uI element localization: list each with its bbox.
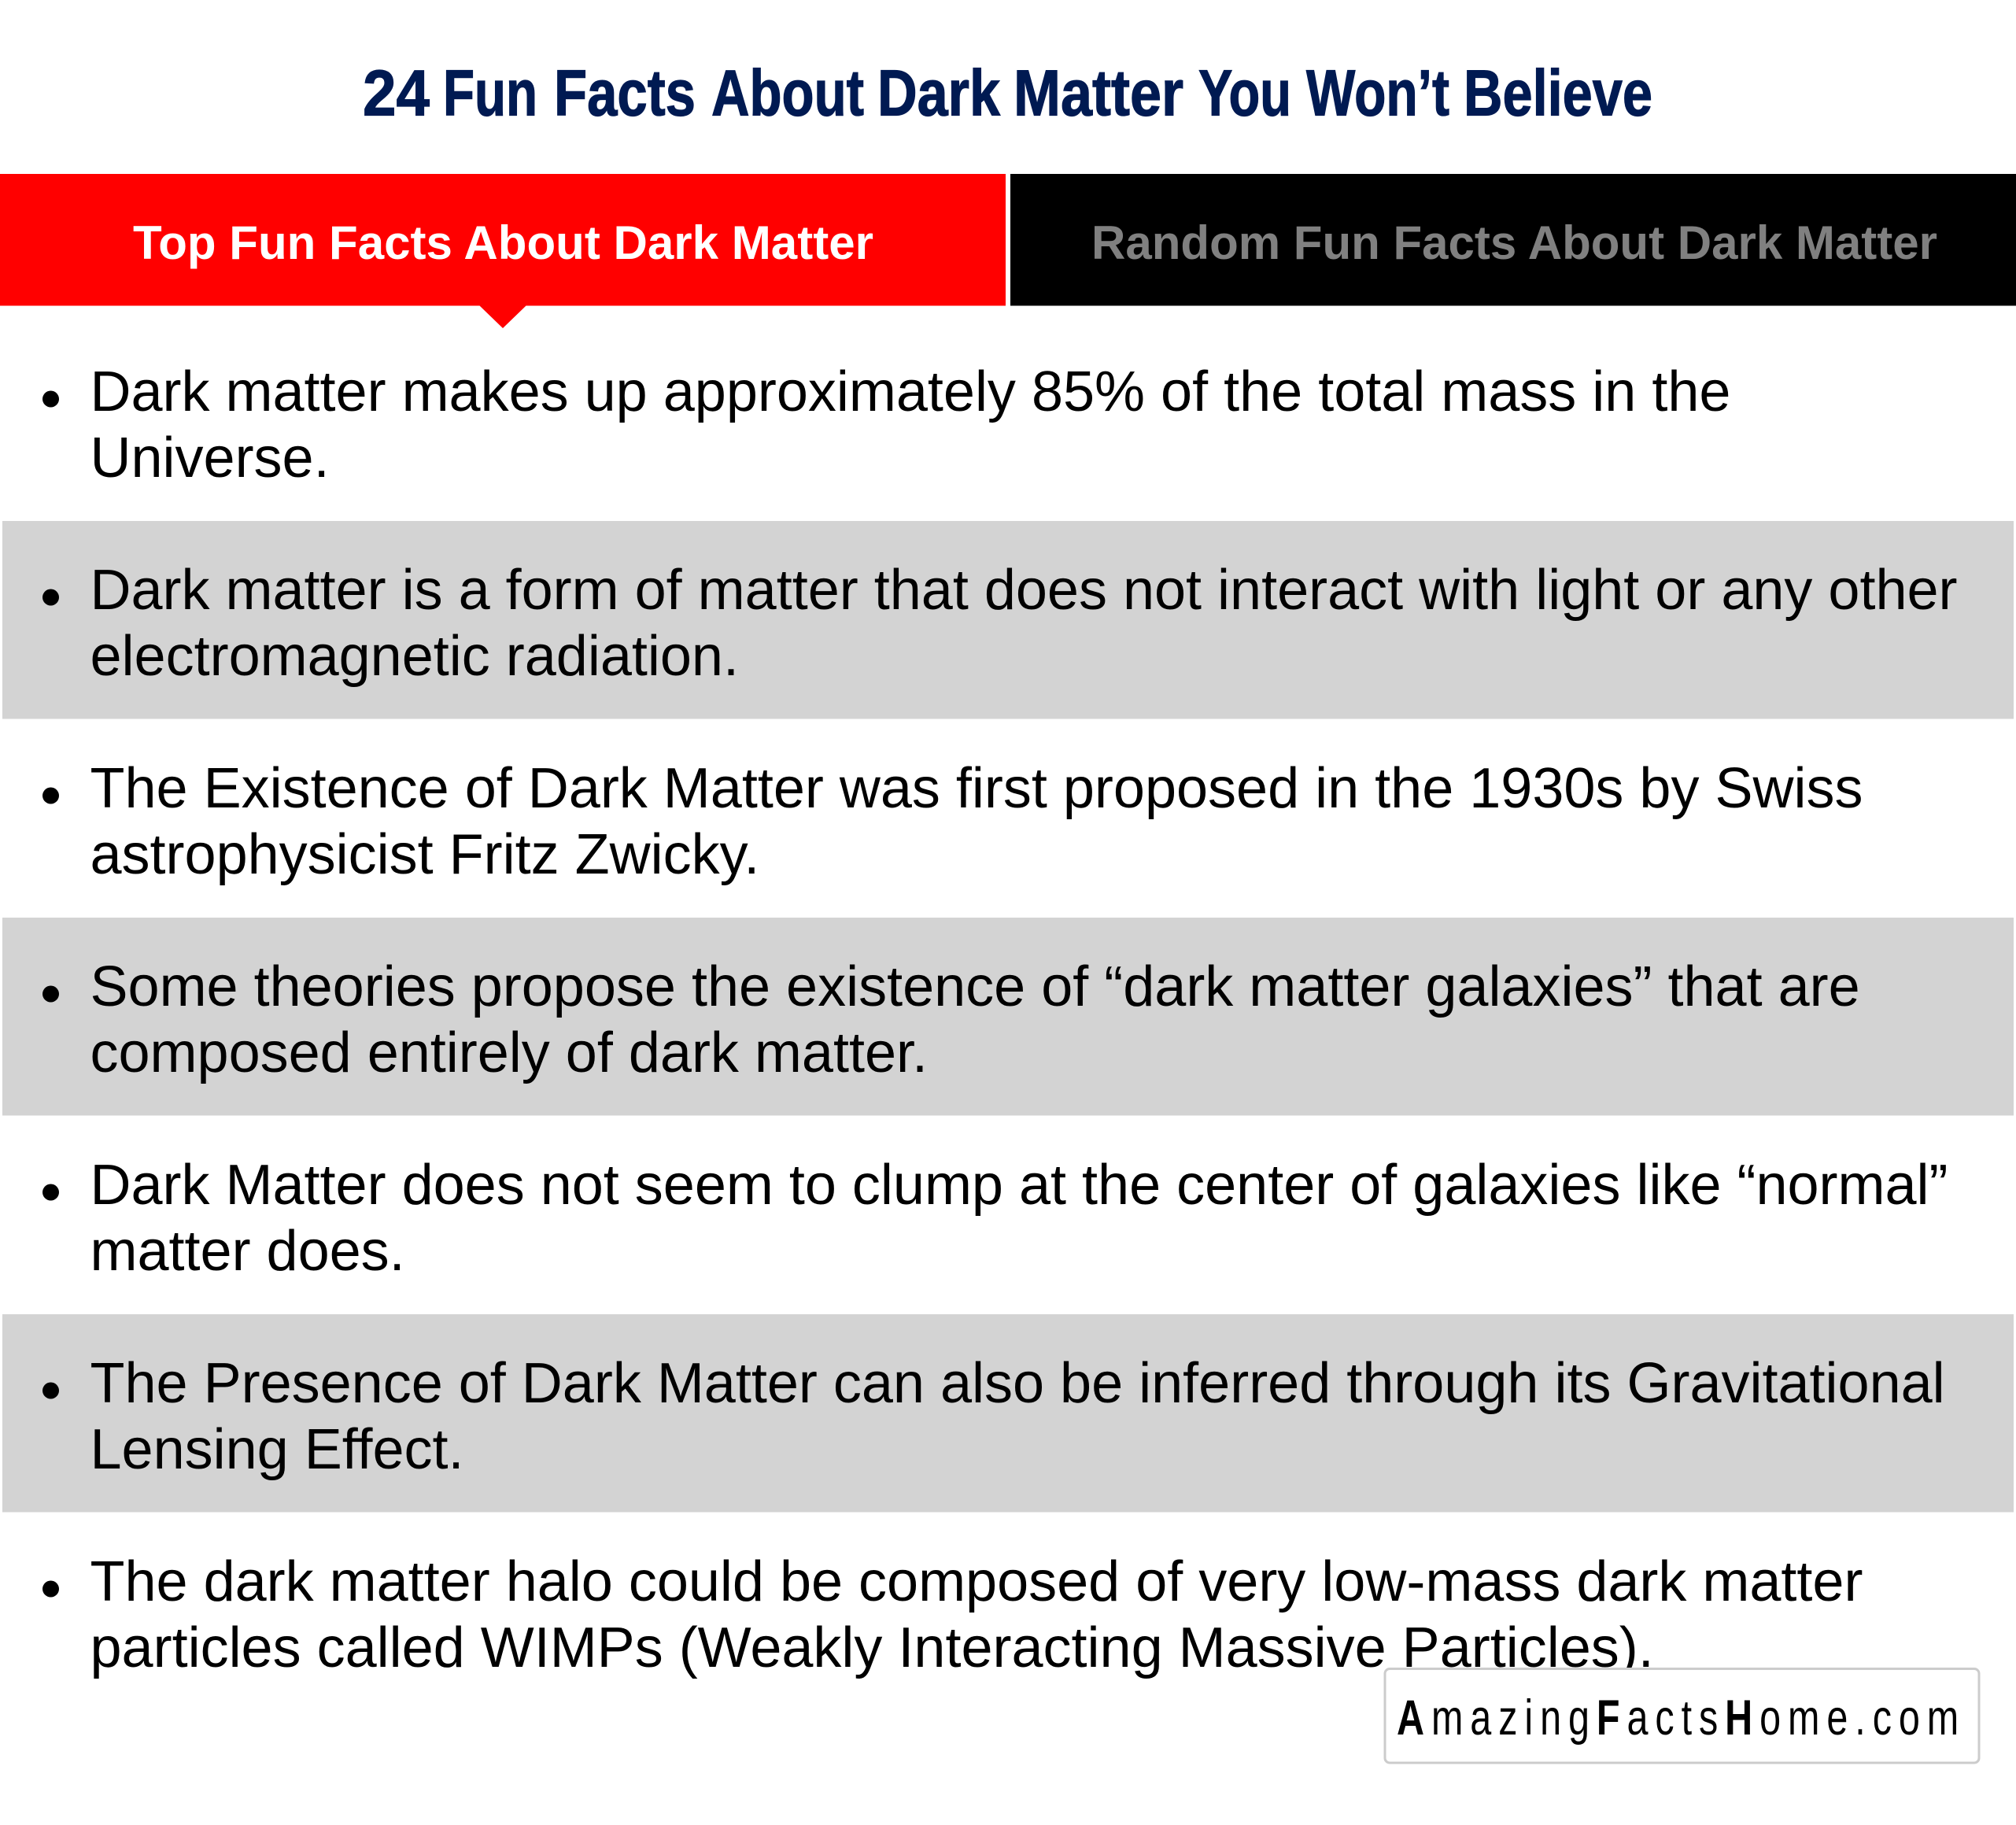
fact 1: Universe. [90, 427, 330, 489]
title: Matter [1014, 57, 1183, 129]
title: You [1198, 57, 1291, 129]
title: Facts [554, 57, 696, 129]
fact 2 row: electromagnetic radiation. [90, 625, 739, 688]
fact 7 [42, 1550, 1863, 1679]
fact 7: particles called WIMPs (Weakly Interacting Massive Particles). [90, 1616, 1654, 1679]
title: Believe [1464, 57, 1652, 129]
fact 7: The dark matter halo could be composed of very low-mass dark matter [90, 1550, 1863, 1613]
fact 2 row: Dark matter is a form of matter that does not interact with light or any other [90, 559, 1958, 622]
title: 24 [363, 57, 430, 129]
fact 3: astrophysicist Fritz Zwicky. [90, 823, 759, 886]
fact 1 [42, 360, 1730, 489]
title: About [711, 57, 864, 129]
title: Won’t [1306, 57, 1449, 129]
tab: random fun facts (inactive): Random Fun Facts About Dark Matter [1091, 216, 1937, 269]
tab: top fun facts (active) [0, 174, 1006, 328]
fact 5: Dark Matter does not seem to clump at the center of galaxies like “normal” [90, 1154, 1948, 1217]
fact 6 row [2, 1314, 2014, 1513]
fact 6 row: The Presence of Dark Matter can also be inferred through its Gravitational [90, 1352, 1945, 1415]
title: Dark [877, 57, 1001, 129]
fact 1: Dark matter makes up approximately 85% of the total mass in the [90, 360, 1730, 423]
fact 3: The Existence of Dark Matter was first proposed in the 1930s by Swiss [90, 757, 1863, 820]
title: Fun [443, 57, 537, 129]
fact 4 row: Some theories propose the existence of “dark matter galaxies” that are [90, 955, 1860, 1018]
fact 3 [42, 757, 1863, 886]
title [363, 57, 1652, 129]
fact 5 [42, 1154, 1948, 1283]
fact 4 row [2, 918, 2014, 1116]
fact 4 row: composed entirely of dark matter. [90, 1021, 928, 1084]
tab: top fun facts (active): Top Fun Facts About Dark Matter [133, 216, 873, 269]
tab: random fun facts (inactive) [1010, 174, 2016, 305]
fact 5: matter does. [90, 1220, 405, 1283]
watermark: AmazingFactsHome.com [1385, 1668, 1979, 1763]
fact 2 row [2, 521, 2014, 719]
fact 6 row: Lensing Effect. [90, 1418, 464, 1481]
watermark: AmazingFactsHome.com: AmazingFactsHome.com [1397, 1690, 1966, 1745]
